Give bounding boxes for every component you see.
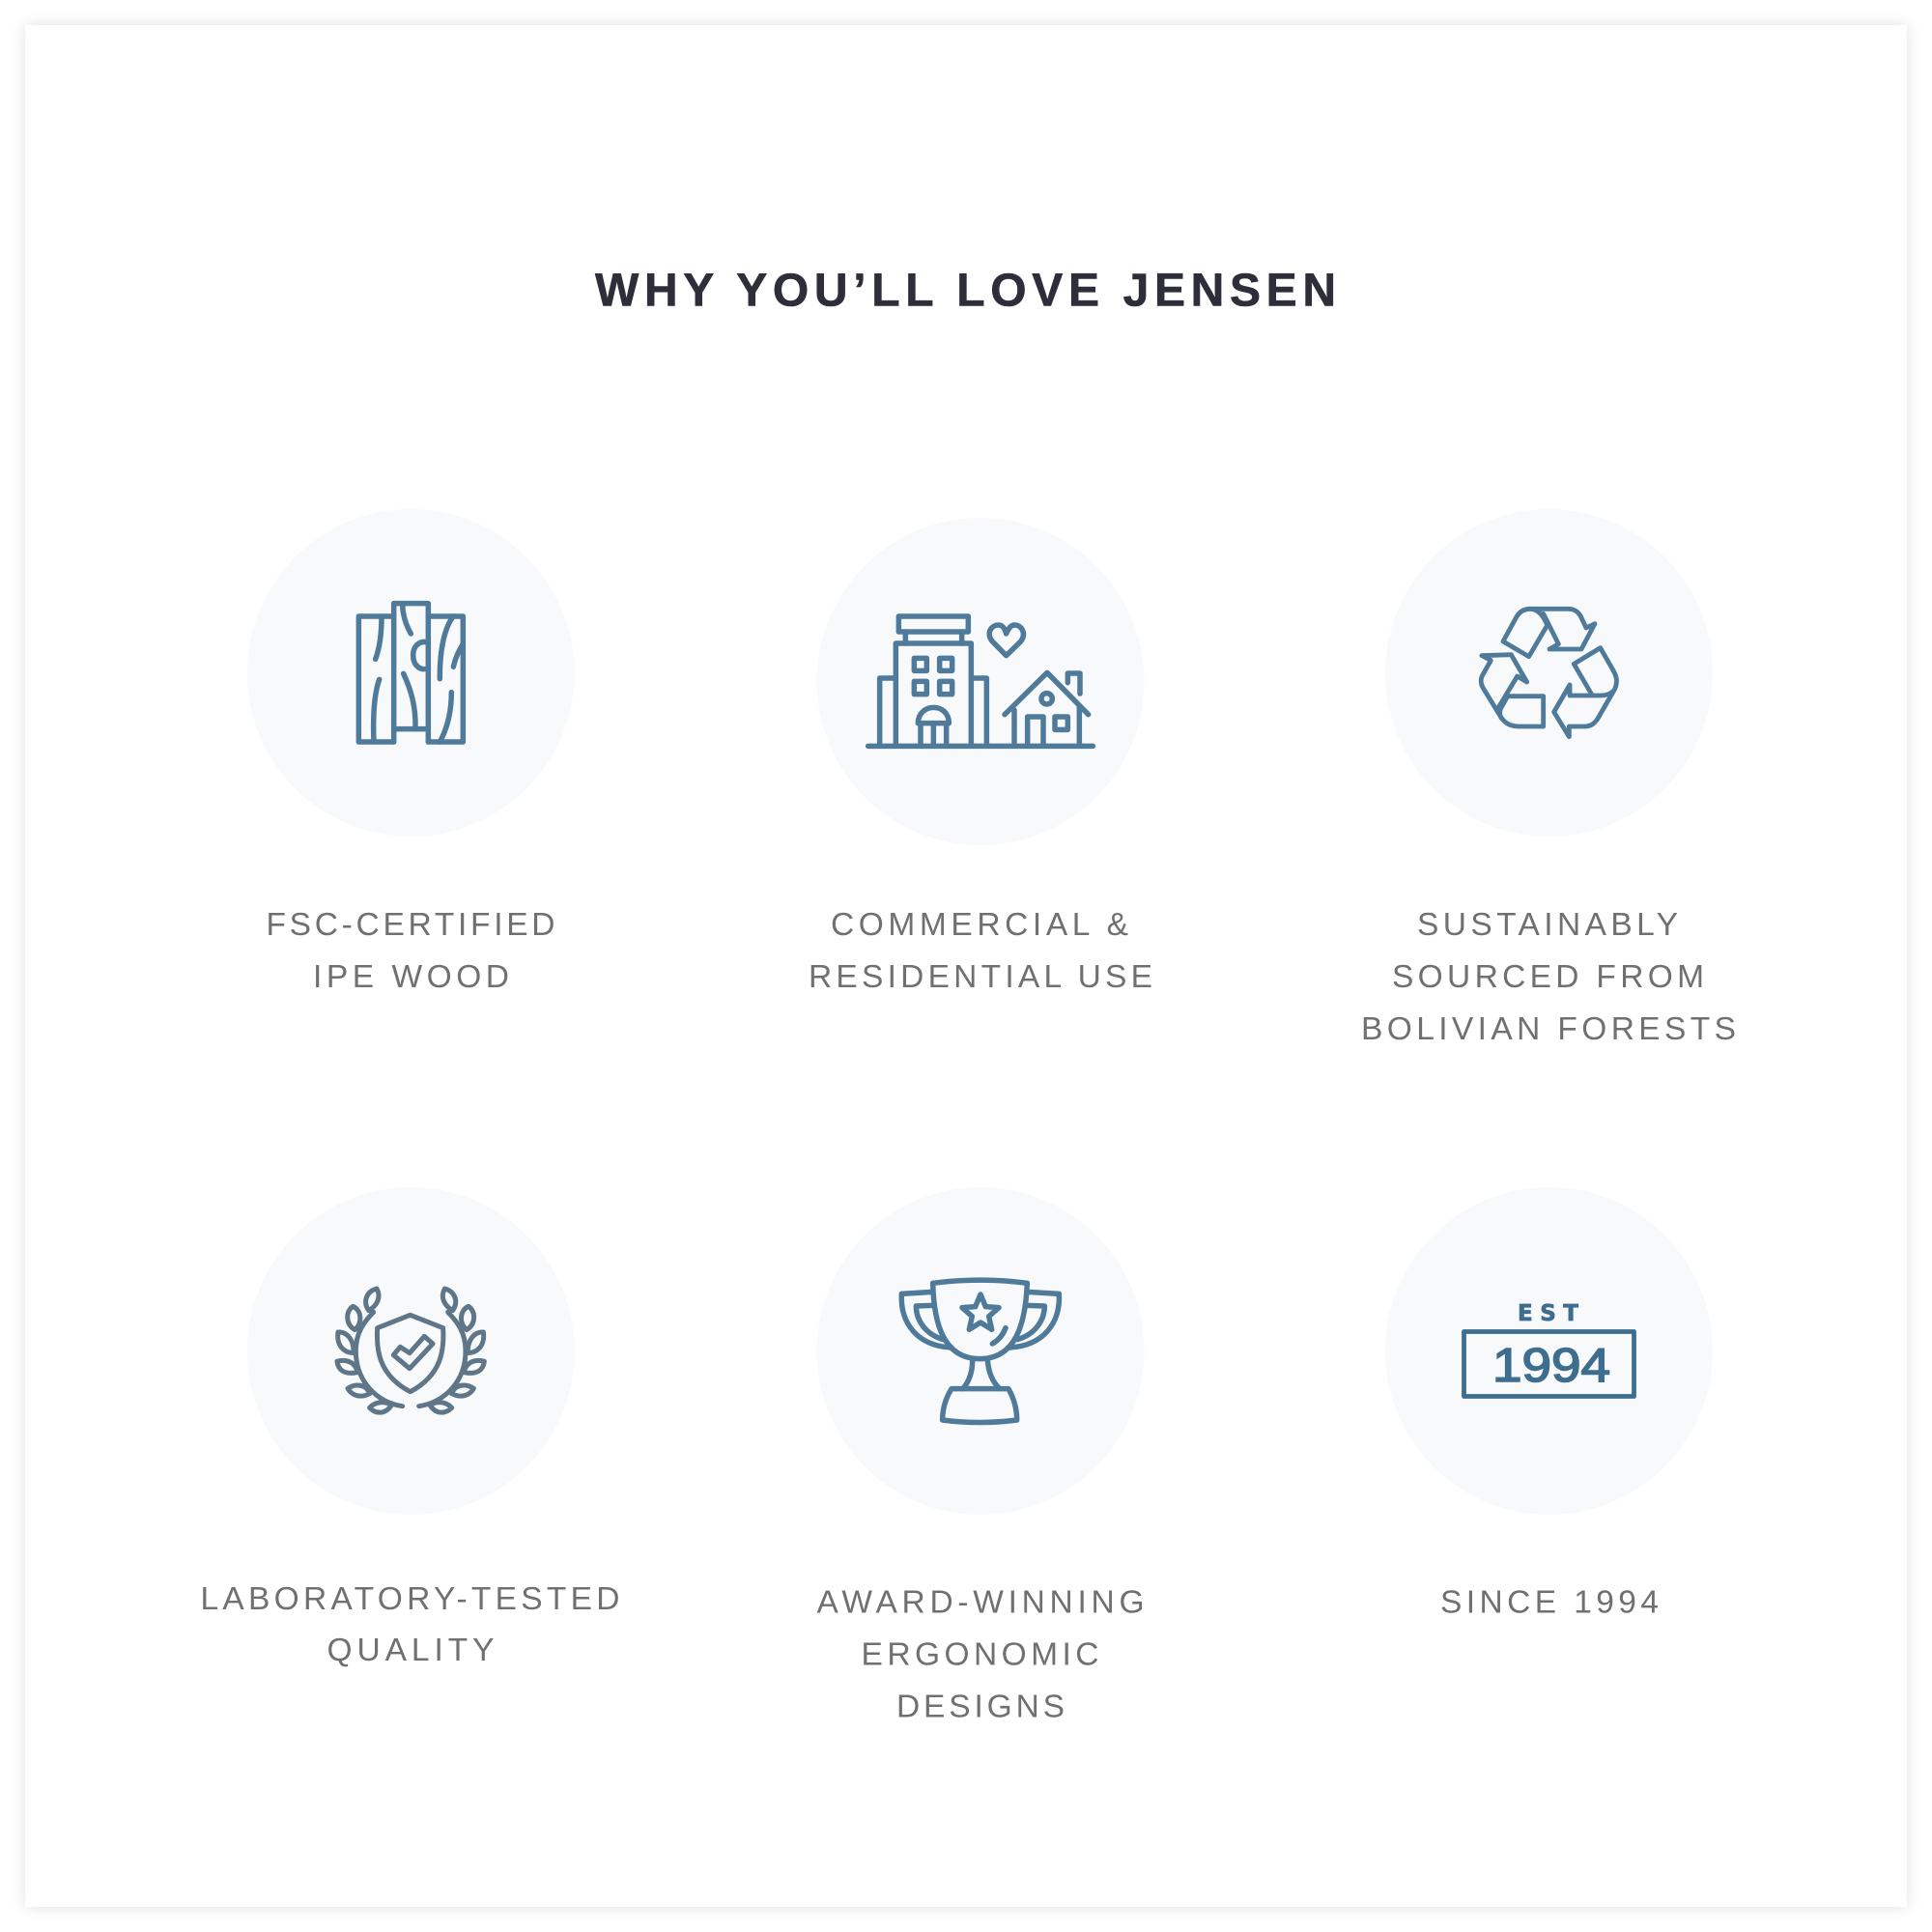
label: DESIGNS [896, 1689, 1065, 1725]
label: AWARD-WINNING [817, 1584, 1144, 1621]
label [809, 907, 1152, 995]
circle background [817, 518, 1144, 845]
icon: building and house [868, 616, 1093, 746]
icon: recycle arrows [1481, 609, 1616, 737]
label: SUSTAINABLY [1417, 907, 1678, 943]
label [1361, 907, 1736, 1047]
panel: award-winning ergonomic designs [817, 1187, 1144, 1725]
circle background [1385, 1187, 1713, 1515]
label: LABORATORY-TESTED [201, 1581, 620, 1617]
label: ERGONOMIC [862, 1636, 1099, 1673]
label [201, 1581, 620, 1668]
circle background [247, 1187, 575, 1515]
label: SINCE 1994 [1440, 1584, 1659, 1621]
panel: commercial and residential use [809, 518, 1152, 995]
label: BOLIVIAN FORESTS [1361, 1011, 1736, 1047]
panel: sustainably sourced [1361, 509, 1736, 1047]
label: IPE WOOD [313, 959, 509, 995]
panel: FSC-certified ipe wood [247, 509, 575, 995]
circle background [1385, 509, 1713, 837]
panel: laboratory-tested quality [201, 1187, 620, 1668]
label: RESIDENTIAL USE [809, 959, 1152, 995]
title: WHY YOU’LL LOVE JENSEN [595, 265, 1336, 317]
label: QUALITY [327, 1633, 495, 1668]
label: FSC-CERTIFIED [267, 907, 554, 943]
circle background [247, 509, 575, 837]
icon: trophy [901, 1280, 1059, 1422]
panel: since 1994 [1385, 1187, 1713, 1621]
icon: shield in laurel wreath [337, 1289, 484, 1412]
icon: wood planks [358, 604, 463, 742]
icon: EST 1994 badge: 1994 [1492, 1340, 1610, 1392]
icon: EST 1994 badge [1464, 1301, 1634, 1397]
label [267, 907, 554, 995]
label: COMMERCIAL & [831, 907, 1128, 943]
label [817, 1584, 1144, 1725]
icon: EST 1994 badge: EST [1518, 1301, 1578, 1326]
circle background [817, 1187, 1144, 1515]
label: SOURCED FROM [1392, 959, 1704, 995]
